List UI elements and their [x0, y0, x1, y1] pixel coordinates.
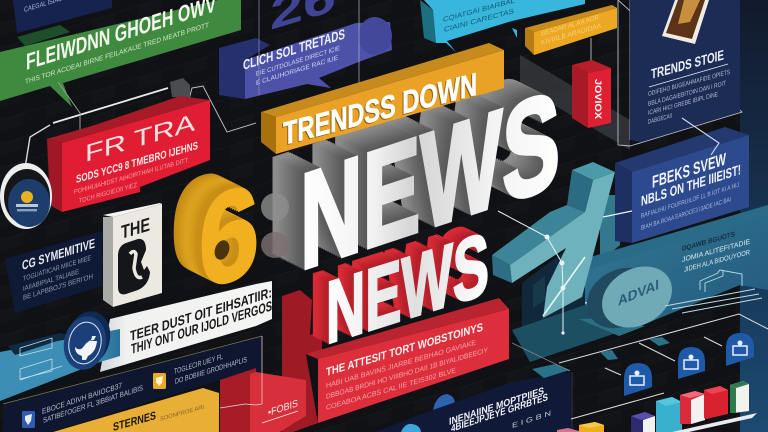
purple card heading: CLICH SOL TRETADS	[243, 27, 345, 74]
panel: red NEWS platform	[282, 290, 509, 432]
big grey and white NEWS: NEWS	[300, 61, 560, 299]
bar: red white	[680, 391, 705, 424]
bar: green white	[730, 381, 749, 413]
panel: orange title plank	[261, 43, 504, 154]
yellow card body: SOONPROE ARI	[160, 404, 204, 423]
teal panel text	[682, 230, 750, 274]
main title: TRENDSS DOWN	[282, 67, 476, 153]
icon: blue shield 3	[726, 333, 754, 366]
panel: blue left ribbon	[0, 307, 120, 401]
bar: red	[704, 386, 728, 419]
ribbon text: TOGLECIR UIEY FL	[174, 352, 223, 376]
navy notes text: INENAIINE MOPTPIIES	[449, 386, 544, 428]
yellow 3D number six: 6	[199, 155, 259, 317]
blue card body: BAFIALIHU FOUFRUILOF LL B IOT KI A HIJ	[641, 182, 739, 220]
trends card body	[648, 69, 730, 126]
teal panel text: DQAWB BGUOTS	[682, 230, 735, 253]
panel: lower navy notes	[376, 364, 572, 432]
ribbon text	[42, 352, 247, 425]
panel: lower red box	[220, 336, 306, 432]
red and white NEWS: NEWS	[326, 214, 489, 364]
trends card body: DABGECAII	[648, 113, 672, 126]
platform body: HABI UAB BAVINS JIARBE BEBHAO GAVIAKE	[326, 339, 476, 390]
panel: small orange tag	[525, 5, 617, 55]
platform body: COEABOA ACBS CAL IIE TEIS302 BLVE	[326, 366, 456, 412]
panel: top-left navy card	[13, 0, 112, 33]
panel: white headline band	[100, 281, 272, 372]
dark card body	[23, 254, 93, 302]
teal panel text: JOMIA ALITEFITADIE	[682, 238, 750, 264]
panel: blue question card: BIAH BA ROAA EAROCE3 I3ADE IAC BAI	[641, 196, 731, 232]
panel: red feature card	[47, 96, 210, 212]
panel: white headline band: THIY ONT OUR IJOLD VERGOS	[131, 299, 272, 358]
white band headline: TEER DUST OIT EIHSATIIR:	[130, 285, 272, 345]
dark card body: TOGUATIICAR MIICE MIEE	[23, 254, 91, 283]
platform body: DBBOAB BRDHI HO VIIIBHO DAII 1B BIYALIDBEECIY	[326, 346, 488, 401]
panel: navy trends card	[618, 0, 742, 146]
dark card body: IAIIABIPIAL TALIABE	[23, 268, 79, 293]
purple card body: BIE CUTDOLASE DIRECT ICIE	[256, 45, 341, 78]
connector lines: lower right	[512, 314, 768, 419]
bar: purple white	[631, 412, 655, 432]
icon: bird badge	[59, 307, 115, 374]
dark card heading: CG SYMEMITIVE	[22, 236, 95, 273]
connector line	[682, 118, 719, 155]
panel: THE white card	[103, 203, 162, 307]
main title: TRENDSS DOWN	[283, 66, 477, 152]
icon: yellow badge	[153, 373, 166, 389]
panel: green speech banner	[0, 0, 241, 107]
ribbon text: SATIBEI'OGER FL 3IBBIAT BALIBIS	[43, 383, 143, 425]
red card subtitle: SODS YCC9 8 TMEBRO IJEHNS	[76, 140, 198, 186]
oval badge label: ADVAI	[618, 277, 659, 310]
panel: dark left info card	[5, 231, 102, 313]
red tag vertical label: JOVIOX	[593, 79, 603, 119]
icon: black glyph	[118, 239, 150, 294]
red box label: •FOBIS	[268, 398, 298, 419]
red card body: POHIHUIAHIDST AIHOIRTHAH ILUTAB DITT	[74, 157, 188, 196]
teal line art	[665, 270, 762, 313]
chart shelf	[672, 413, 757, 432]
icon: ring badge	[0, 163, 52, 229]
dark card body: BE LAPBBOJ'S BERI'OH	[23, 272, 93, 302]
panel: blue question card	[603, 118, 749, 243]
bar: yellow	[579, 422, 604, 432]
THE label: THE	[121, 214, 150, 244]
ribbon text: EBOCE ADIVH BAIIOCB37	[42, 381, 122, 416]
icon: blue shield 1	[624, 363, 652, 396]
blue card heading: FBEKS SVEW	[652, 149, 726, 192]
bar: pink	[557, 428, 579, 432]
ribbon outlined tags	[20, 338, 62, 380]
oval badge	[576, 254, 683, 340]
panel: cyan speech card	[420, 0, 585, 52]
panel: cyan speech card: CIAINI CARECTAS	[444, 7, 514, 34]
icon: blue shield 2	[678, 347, 705, 379]
platform heading: THE ATTESIT TORT WOBSTOINYS	[326, 321, 483, 379]
bar chart	[557, 381, 757, 432]
red card title: FR TRA	[85, 109, 196, 168]
panel: lower navy notes: E I G B N	[512, 409, 551, 430]
ribbon text: DO BOBIIIE GRODHHAPLIS	[175, 355, 247, 386]
connector lines: red card to ring	[25, 82, 256, 168]
panel: red feature card: TOCH RIGOIEOII YIEZ	[79, 182, 137, 205]
orange tag text: BEADAR AL AA AOR	[541, 13, 599, 38]
green banner caption: THIS TOR ACOEAI BIRNE FEILAKAIJE TRED MEATB PROTT	[25, 21, 210, 86]
icon: blue badge	[22, 411, 35, 428]
panel: small red tag	[572, 60, 611, 128]
teal node lines	[498, 211, 585, 335]
trends card heading: TRENDS STOIE	[651, 48, 724, 83]
teal panel text: JIDEH ALA BIDOUYOOR	[684, 248, 750, 274]
trends card body: BBLA DAGAIEBITOIN DAN I ROIT	[648, 80, 726, 108]
panel: small orange tag: KIVIALB ARADIDAA	[541, 22, 601, 47]
panel: purple speech card	[219, 0, 392, 99]
trends card body: ODIFEHO BUGEAHMAFIDE OPIETS	[648, 69, 730, 98]
panel: teal backdrop with arrow	[492, 162, 768, 362]
phone image	[662, 0, 709, 44]
panel: dark lower ribbon	[3, 336, 262, 432]
trends card body: ICARI HICI GREBE IBIPL DINE	[648, 91, 718, 117]
main title	[282, 66, 477, 153]
panel: yellow bottom card	[53, 388, 219, 432]
bar: cyan	[656, 397, 682, 432]
panel: purple speech card: E CLAUHORIAGE RAC IUE	[256, 55, 339, 87]
teal arrow shape	[492, 162, 615, 318]
